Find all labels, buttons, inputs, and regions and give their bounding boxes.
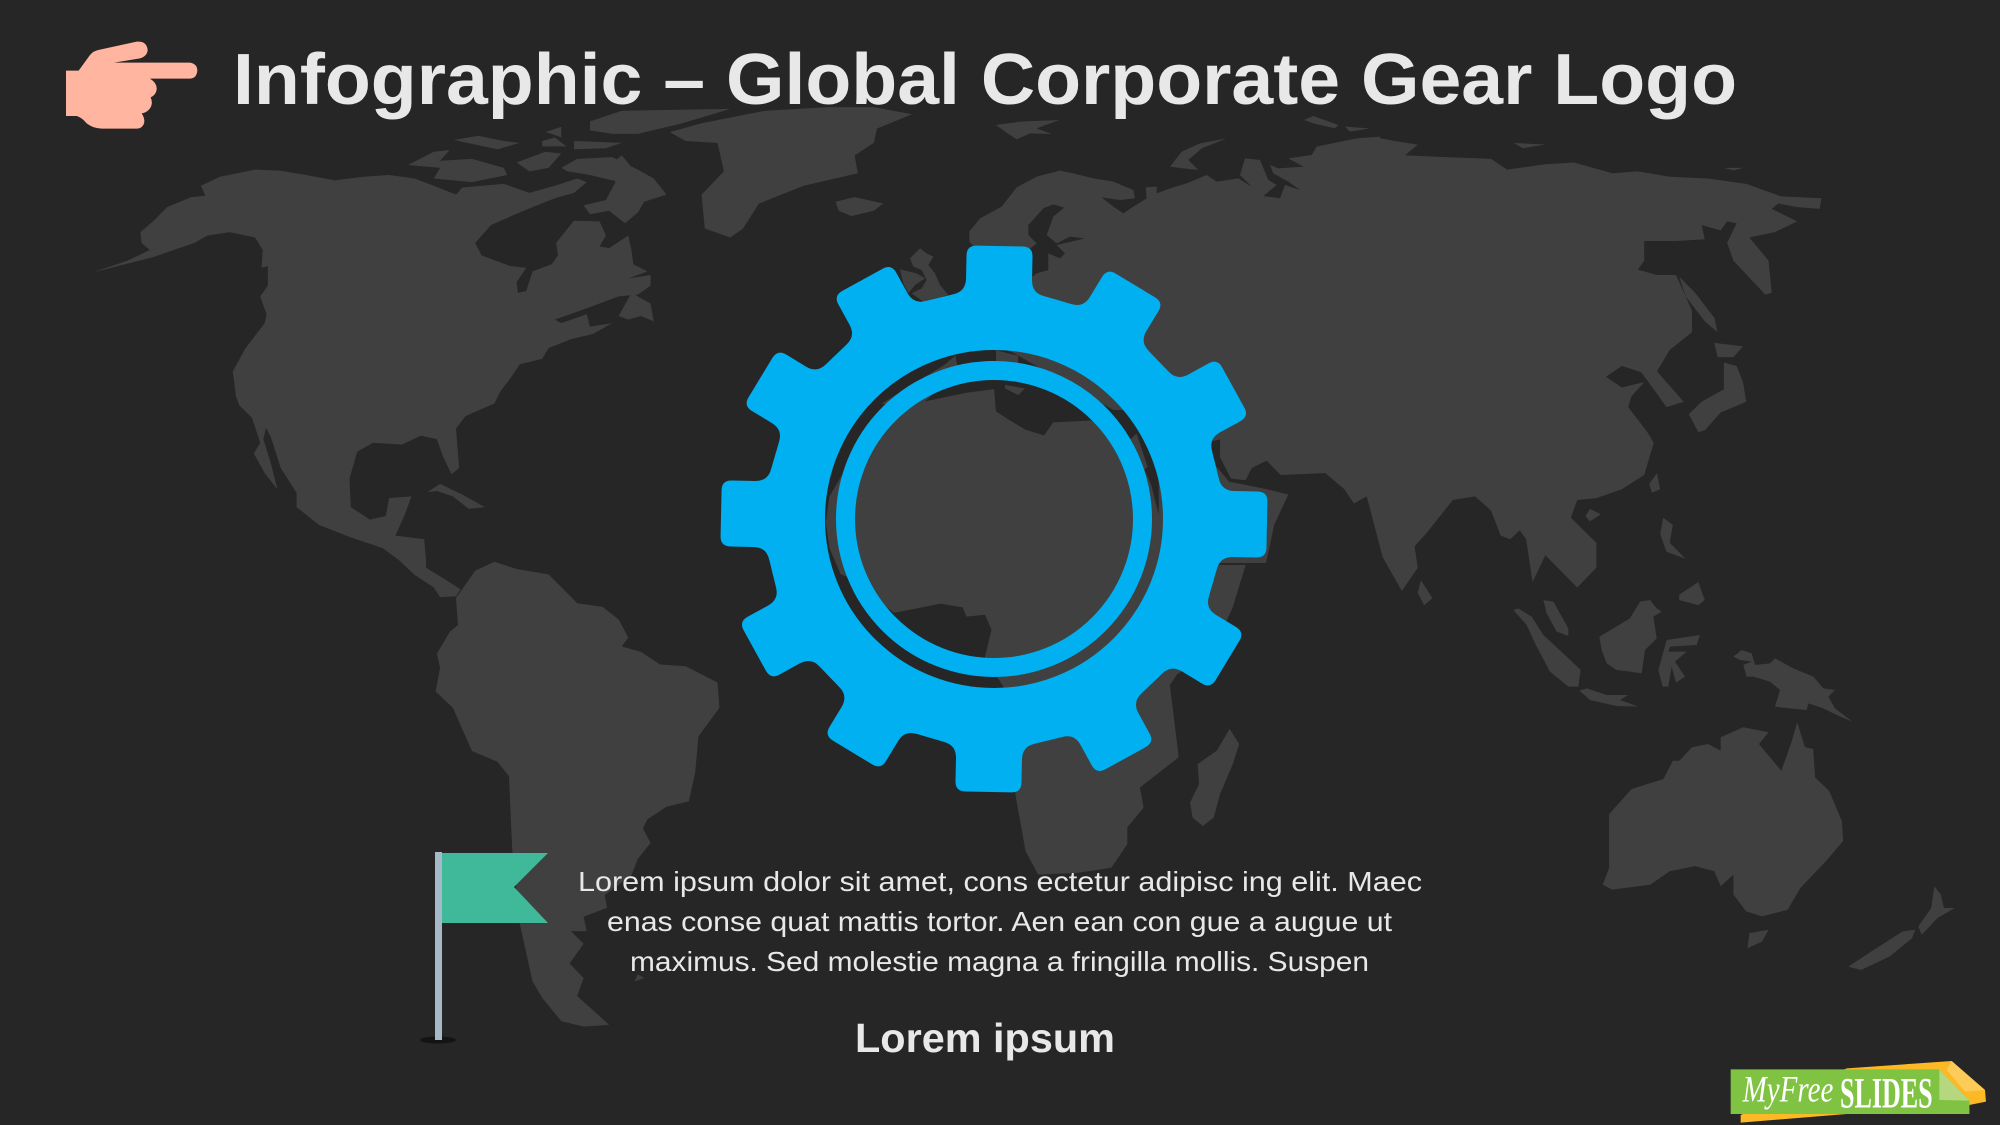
world map [92,107,1955,1027]
title: Infographic – Global Corporate Gear Logo [233,40,1737,120]
icon: green flag [420,852,548,1044]
logo: MyFree Slides: SLIDES [1840,1070,1933,1118]
gear teeth [715,240,1273,798]
subheading: Lorem ipsum [855,1015,1115,1061]
body text: Lorem ipsum dolor sit amet, cons ectetur adipisc ing elit. Maec [578,866,1422,897]
gear inner ring [846,370,1142,668]
europe and northern eurasia [900,116,1380,410]
logo: MyFree Slides [1731,1061,1986,1123]
north america and arctic [92,107,912,597]
africa and arabia [826,350,1288,874]
australia, new zealand and madagascar [1190,722,1955,970]
south america [436,562,719,1027]
icon: pointing hand [66,42,197,129]
gear body ring [796,320,1192,718]
body text: enas conse quat mattis tortor. Aen ean con gue a augue ut [607,906,1392,937]
body text [578,866,1422,977]
icon: blue gear logo [715,240,1273,798]
body text: maximus. Sed molestie magna a fringilla mollis. Suspen [630,946,1369,977]
logo: MyFree Slides: MyFree [1742,1069,1833,1110]
oceania and indonesia [1513,600,1852,722]
asia [1096,137,1821,605]
